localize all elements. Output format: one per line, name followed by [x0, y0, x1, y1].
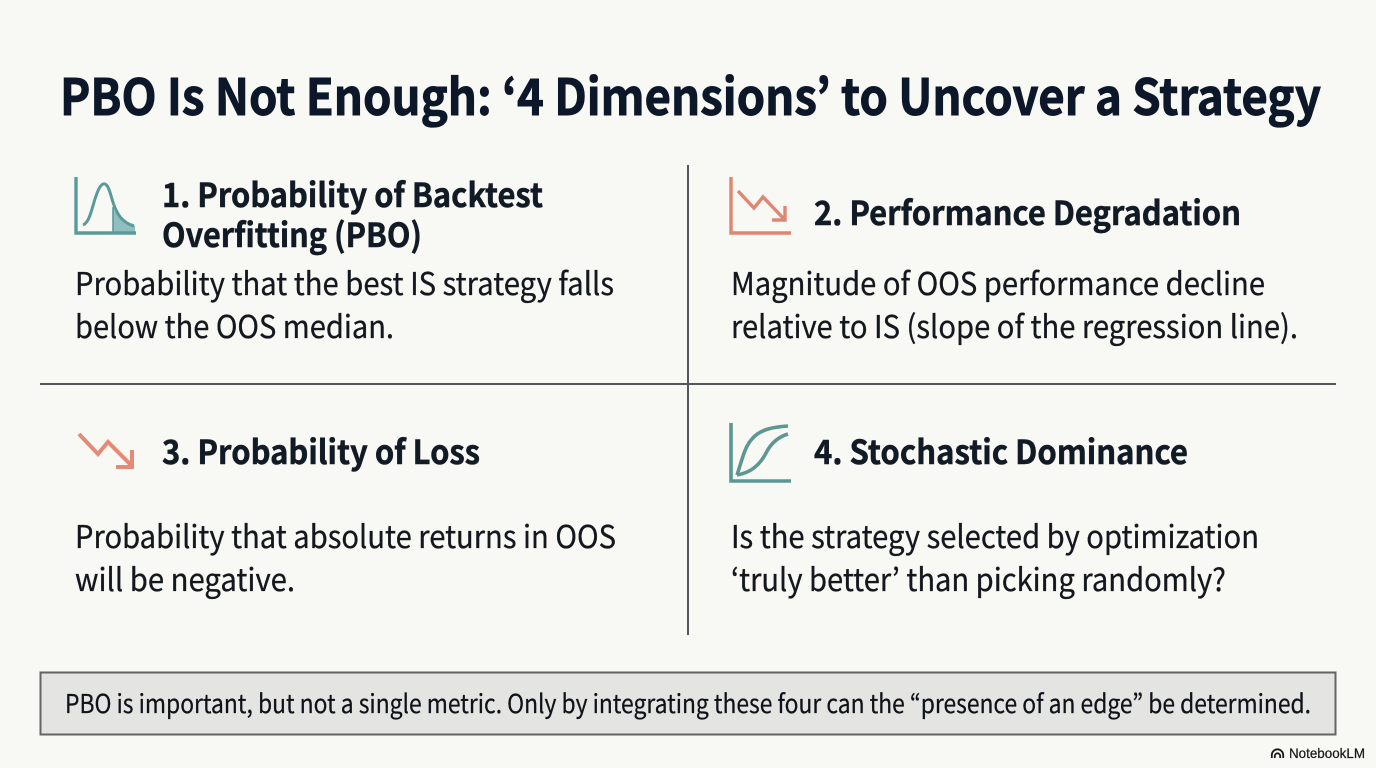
- panel: degradation: relative to IS (slope of the regression line).: [731, 302, 1298, 348]
- panel: PBO: [75, 169, 614, 348]
- heading: 3: 3. Probability of Loss: [162, 426, 480, 474]
- heading: 4: 4. Stochastic Dominance: [814, 426, 1188, 474]
- body: 1: Probability that the best IS strategy falls: [75, 259, 614, 305]
- panel: dominance: [731, 423, 1259, 601]
- callout banner: [40, 672, 1336, 734]
- body: 2: Magnitude of OOS performance decline: [731, 259, 1265, 305]
- panel: loss: [75, 426, 616, 601]
- panel: PBO: Overfitting (PBO): [162, 209, 422, 257]
- panel: loss: will be negative.: [75, 555, 295, 601]
- icon: two cumulative curves: [731, 423, 791, 481]
- NotebookLM logo: NotebookLM: [1289, 745, 1365, 761]
- body: 3: Probability that absolute returns in OOS: [75, 512, 616, 558]
- body: 4: Is the strategy selected by optimization: [731, 512, 1259, 558]
- heading: 1: 1. Probability of Backtest: [162, 169, 543, 217]
- panel: dominance: ‘truly better’ than picking randomly?: [731, 555, 1226, 601]
- icon: down arrow: [79, 434, 132, 467]
- panel: degradation: [731, 177, 1298, 348]
- icon: bell curve with shaded tail: [76, 177, 136, 233]
- panel: PBO: below the OOS median.: [75, 302, 394, 348]
- icon: declining chart: [731, 177, 791, 233]
- heading: 2: 2. Performance Degradation: [814, 187, 1241, 235]
